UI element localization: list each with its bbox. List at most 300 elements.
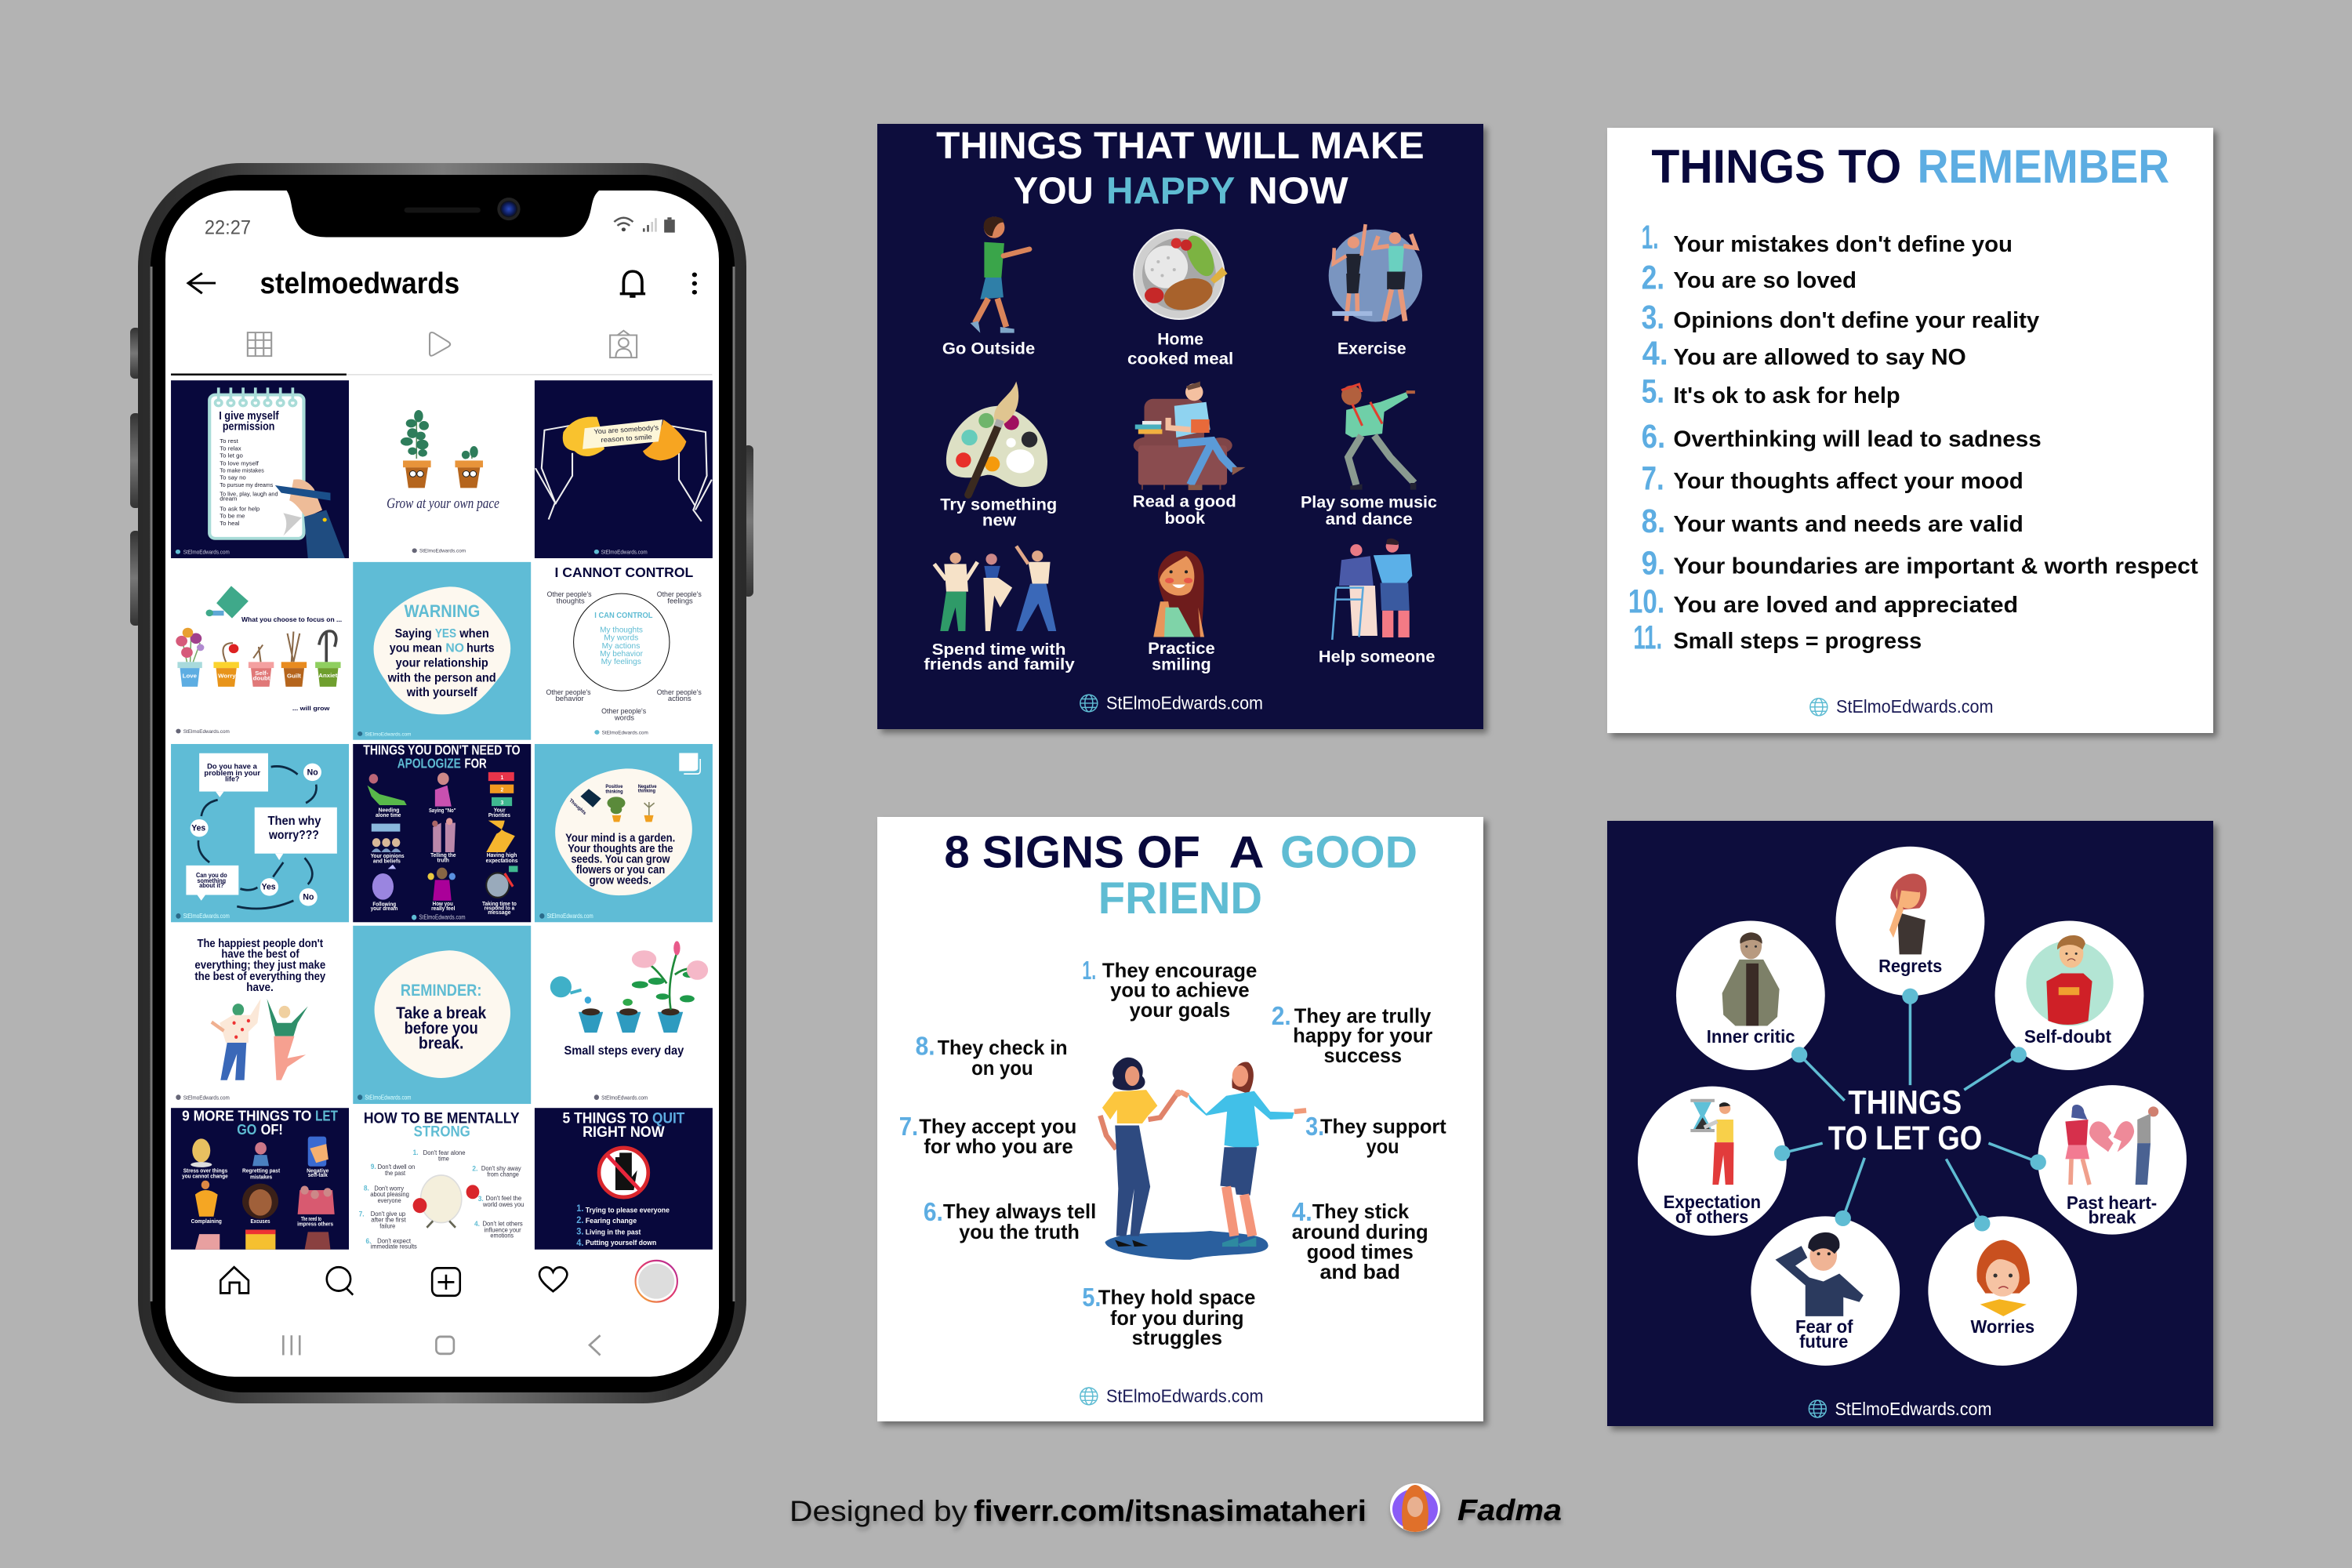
tile: 9 more things to let go of: OF!: [261, 1121, 283, 1138]
numbered list: Overthinking will lead to sadness: [1673, 426, 2042, 452]
tile: how to be mentally strong: Don't feel the: [486, 1195, 521, 1202]
tile: how to be mentally strong: 2.: [472, 1164, 477, 1172]
tile: I give myself permission: To pursue my dreams: [220, 481, 273, 488]
numbered signs: 2.: [1272, 1002, 1291, 1031]
heading: NOW: [1248, 170, 1348, 212]
icon: profile avatar: [636, 1261, 677, 1302]
tile: how to be mentally strong: HOW TO BE MENTALLY: [364, 1109, 520, 1127]
tile: what you choose to focus on: Self-: [255, 670, 269, 677]
numbered signs: for who you are: [924, 1134, 1073, 1158]
tile: reminder: REMINDER:: [401, 981, 481, 1000]
tile: why worry flowchart: about it?: [199, 882, 224, 889]
tile: reminder: StElmoEdwards.com: [365, 1094, 412, 1102]
tile: fortune cookie: You are somebody's: [593, 423, 659, 435]
circle: past heartbreak: break: [2088, 1207, 2136, 1227]
tile: I cannot control: Other people's: [601, 707, 647, 715]
tile: I cannot control: My actions: [602, 642, 640, 651]
circle: self-doubt: Self-doubt: [2024, 1026, 2111, 1047]
item: spend time with friends and family: friends and family: [924, 655, 1075, 673]
numbered signs: They accept you: [919, 1115, 1076, 1138]
circle: inner critic: Inner critic: [1707, 1026, 1795, 1047]
tile: your mind is a garden: Your thoughts are the: [568, 842, 673, 855]
notch with camera: [285, 189, 601, 237]
tile: warning: WARNING: [405, 601, 480, 621]
heading: THINGS: [1848, 1084, 1962, 1121]
tile: warning: hurts: [466, 641, 495, 655]
tile: how to be mentally strong: time: [438, 1155, 449, 1163]
tile: 5 things to quit right now: 4.: [576, 1238, 583, 1248]
numbered list: 2.: [1642, 259, 1664, 296]
tile: things you don't need to apologize for: truth: [437, 858, 449, 863]
item: home cooked meal: cooked meal: [1127, 349, 1233, 368]
numbered signs: They always tell: [943, 1200, 1096, 1223]
numbered signs: success: [1324, 1044, 1402, 1067]
tile: fortune cookie: reason to smile: [601, 433, 652, 444]
circle: past heartbreak: [2030, 1085, 2187, 1235]
numbered signs: 6.: [924, 1198, 943, 1227]
tile: how to be mentally strong: 4.: [474, 1220, 480, 1228]
item: play some music and dance: and dance: [1326, 509, 1413, 528]
tile: I give myself permission: To make mistakes: [220, 467, 264, 474]
tile: how to be mentally strong: 7.: [359, 1210, 365, 1218]
tile: why worry flowchart: StElmoEdwards.com: [183, 913, 230, 920]
tile: I give myself permission: To love myself: [220, 460, 260, 466]
numbered signs: on you: [971, 1056, 1033, 1080]
circle: worries: Worries: [1970, 1316, 2034, 1337]
tile: warning: NO: [445, 641, 464, 655]
icon: reels tab: [430, 332, 450, 356]
tile: things you don't need to apologize for: Saying "No": [429, 808, 456, 814]
tile: how to be mentally strong: world owes you: [482, 1201, 524, 1208]
tile: 9 more things to let go of: [171, 1108, 349, 1250]
tile: how to be mentally strong: everyone: [378, 1197, 401, 1204]
tile: small steps every day: [535, 926, 713, 1104]
numbered list: 5.: [1642, 372, 1664, 410]
tile: things you don't need to apologize for: StElmoEdwards.com: [419, 913, 466, 920]
icon: home: [220, 1267, 249, 1293]
tile: I cannot control: Other people's: [657, 590, 702, 598]
heading: 8 SIGNS OF: [944, 827, 1200, 877]
tile: I cannot control: Other people's: [546, 688, 591, 696]
circle: expectation of others: Expectation: [1664, 1192, 1761, 1212]
tile: I cannot control: My words: [604, 634, 638, 643]
tile: I cannot control: Other people's: [657, 688, 702, 696]
tile: the happiest people: The happiest people don't: [198, 938, 323, 950]
tile: things you don't need to apologize for: your dream: [371, 906, 397, 912]
numbered signs: struggles: [1132, 1326, 1222, 1349]
footer: website: StElmoEdwards.com: [1106, 693, 1263, 713]
tile: 5 things to quit right now: 3.: [576, 1227, 583, 1237]
numbered signs: 8.: [916, 1033, 935, 1061]
tile: I give myself permission: I give myself: [219, 410, 279, 423]
tile: things you don't need to apologize for: alone time: [376, 813, 401, 818]
tile: what you choose to focus on: doubt: [253, 675, 270, 682]
tile: your mind is a garden: Positive: [605, 785, 623, 789]
item: help someone: Help someone: [1319, 646, 1435, 666]
icon: bell: [620, 271, 645, 296]
heading: REMEMBER: [1918, 140, 2169, 193]
tile: reminder: break.: [419, 1034, 463, 1053]
circle: inner critic: [1676, 921, 1825, 1070]
icon: add post: [432, 1268, 460, 1296]
android navigation bar: [283, 1335, 601, 1356]
numbered list: You are loved and appreciated: [1673, 593, 2018, 618]
numbered signs: and bad: [1319, 1260, 1400, 1283]
heading: [1651, 140, 2169, 193]
tile: things you don't need to apologize for: FOR: [464, 756, 487, 771]
tile: I cannot control: StElmoEdwards.com: [602, 731, 648, 735]
numbered list: 6.: [1642, 418, 1665, 456]
tile: 9 more things to let go of: Negative: [307, 1168, 328, 1174]
tile: how to be mentally strong: [359, 1112, 524, 1248]
tile: warning: Saying: [395, 626, 432, 641]
tile: things you don't need to apologize for: Having high: [487, 853, 517, 858]
tile: 5 things to quit right now: RIGHT NOW: [583, 1123, 665, 1140]
tile: Grow at your own pace: StElmoEdwards.com: [419, 549, 466, 554]
tile: 9 more things to let go of: Stress over things: [183, 1168, 227, 1174]
heading: THINGS THAT WILL MAKE: [936, 125, 1425, 167]
tile: why worry flowchart: Do you have a: [207, 762, 258, 770]
numbered list: [1628, 219, 2198, 657]
tile: things you don't need to apologize for: Your: [494, 808, 506, 813]
numbered signs: 7.: [899, 1112, 918, 1142]
illustration: two friends high five: [1100, 1058, 1306, 1260]
tile: I give myself permission: To say no: [220, 474, 246, 481]
tile: how to be mentally strong: 6.: [365, 1237, 371, 1245]
circle: fear of future: Fear of: [1795, 1316, 1853, 1337]
tile: I cannot control: I CANNOT CONTROL: [555, 565, 693, 580]
tile: I give myself permission: permission: [223, 420, 274, 434]
heading: HAPPY: [1106, 170, 1235, 212]
panel: things to remember: [1607, 128, 2213, 733]
circle: expectation of others: [1638, 1087, 1790, 1236]
tile: 5 things to quit right now: QUIT: [652, 1109, 685, 1127]
tile: why worry flowchart: Then why: [267, 815, 321, 828]
item: practice smiling: Practice: [1148, 638, 1215, 658]
tile: warning: with yourself: [406, 685, 477, 699]
icon: search: [327, 1267, 353, 1295]
tile: why worry flowchart: No: [303, 892, 314, 902]
tile: 9 more things to let go of: you cannot change: [182, 1174, 228, 1179]
tile: why worry flowchart: No: [307, 768, 318, 777]
tile: things you don't need to apologize for: 1: [501, 775, 503, 781]
tile: 9 more things to let go of: The need to: [301, 1217, 321, 1222]
item: play some music and dance: Play some music: [1301, 492, 1437, 511]
tile: I cannot control: behavior: [556, 695, 584, 702]
tile: 9 more things to let go of: mistakes: [250, 1174, 272, 1181]
tile: why worry flowchart: [171, 744, 349, 922]
item: try something new: Try something: [940, 494, 1057, 514]
tile: I cannot control: feelings: [667, 597, 693, 605]
tile: reminder: Take a break: [396, 1004, 487, 1022]
status icons: [614, 217, 675, 233]
credit line: [789, 1483, 1562, 1532]
tile: Grow at your own pace: [353, 380, 531, 558]
panel: things to let go: [1607, 821, 2213, 1426]
tile: how to be mentally strong: immediate results: [371, 1243, 417, 1250]
icon: grid tab: [248, 332, 271, 356]
tile: reminder: [353, 926, 531, 1104]
tile: 5 things to quit right now: [535, 1108, 713, 1250]
tile: why worry flowchart: something: [198, 877, 226, 884]
tile: why worry flowchart: Can you do: [196, 872, 227, 879]
numbered list: 3.: [1642, 299, 1664, 336]
tile: I cannot control: Other people's: [547, 590, 592, 598]
numbered signs: They encourage: [1102, 959, 1257, 982]
tile: things you don't need to apologize for: Priorities: [488, 813, 510, 818]
tile: what you choose to focus on: Love: [183, 673, 197, 680]
tile: I give myself permission: To let go: [220, 452, 243, 459]
tile: how to be mentally strong: about pleasing: [370, 1191, 409, 1198]
tile: things you don't need to apologize for: 2: [501, 787, 503, 793]
numbered list: Your wants and needs are valid: [1673, 512, 2024, 537]
tile: how to be mentally strong: after the first: [371, 1216, 407, 1224]
circle: past heartbreak: Past heart-: [2067, 1192, 2157, 1213]
numbered list: 8.: [1642, 503, 1665, 540]
tile: 5 things to quit right now: Putting yourself down: [586, 1239, 657, 1247]
tile: I give myself permission: To ask for help: [220, 506, 260, 512]
tile: I give myself permission: dream: [220, 495, 237, 502]
tile: I cannot control: My thoughts: [600, 626, 643, 634]
tile: things you don't need to apologize for: message: [488, 910, 511, 916]
tile: why worry flowchart: Yes: [262, 882, 276, 892]
tile: 5 things to quit right now: 1.: [576, 1204, 583, 1214]
tile: why worry flowchart: problem in your: [204, 769, 260, 777]
tile: I give myself permission: To live, play, laugh and: [220, 491, 278, 497]
tile: 9 more things to let go of: Complaining: [191, 1219, 222, 1225]
tile: what you choose to focus on: ... will grow: [292, 705, 330, 712]
numbered signs: 1.: [1082, 956, 1096, 985]
numbered signs: They check in: [938, 1036, 1068, 1059]
tile: warning: [353, 562, 531, 740]
numbered list: 7.: [1642, 459, 1664, 497]
phone screen: [165, 191, 719, 1377]
tile: I cannot control: actions: [668, 695, 691, 702]
tile: things you don't need to apologize for: and beliefs: [373, 858, 401, 865]
heading: [1828, 1084, 1982, 1157]
numbered signs: you: [1367, 1134, 1399, 1158]
tile: reminder: before you: [405, 1019, 478, 1037]
tab underline: [171, 373, 712, 376]
tile: I cannot control: words: [614, 714, 634, 721]
tile: things you don't need to apologize for: APOLOGIZE: [397, 756, 461, 771]
tile: how to be mentally strong: Don't shy away: [481, 1165, 521, 1172]
profile name: stelmoedwards: [260, 267, 459, 300]
numbered signs: [899, 956, 1446, 1349]
tile: how to be mentally strong: 8.: [364, 1184, 369, 1192]
tile: how to be mentally strong: STRONG: [414, 1123, 470, 1140]
phone side buttons: [130, 328, 753, 626]
item: go outside: [942, 216, 1035, 358]
circle: self-doubt: [1995, 921, 2143, 1070]
numbered list: It's ok to ask for help: [1673, 383, 1900, 408]
back arrow: [188, 273, 216, 293]
tile: your mind is a garden: flowers or you can: [576, 863, 665, 876]
heading: TO LET GO: [1828, 1120, 1982, 1157]
tile: how to be mentally strong: influence your: [485, 1226, 521, 1233]
tile: your mind is a garden: [535, 744, 713, 922]
item: go outside: Go Outside: [942, 338, 1035, 358]
tile: small steps every day: StElmoEdwards.com: [601, 1095, 648, 1102]
tile: 9 more things to let go of: LET: [315, 1108, 338, 1124]
numbered list: Your boundaries are important & worth respect: [1673, 554, 2198, 579]
tile: 5 things to quit right now: Fearing change: [586, 1217, 637, 1225]
numbered list: 4.: [1642, 335, 1668, 372]
item: read a good book: Read a good: [1133, 491, 1236, 510]
heading: THINGS TO: [1651, 140, 1901, 193]
tile: I cannot control: thoughts: [557, 597, 585, 605]
tile: warning: your relationship: [396, 655, 488, 670]
numbered list: 10.: [1628, 583, 1664, 621]
tile: warning: with the person and: [387, 670, 496, 684]
tile: your mind is a garden: thinking: [605, 789, 623, 794]
heading: A: [1229, 827, 1265, 877]
tile: your mind is a garden: Thoughts: [568, 798, 587, 816]
tile: the happiest people: [171, 926, 349, 1104]
item: home cooked meal: [1127, 230, 1233, 368]
designer text: Designed by: [789, 1495, 968, 1527]
tile: I give myself permission: StElmoEdwards.com: [183, 549, 230, 556]
numbered signs: They are trully: [1294, 1004, 1432, 1027]
item: try something new: [940, 382, 1057, 529]
tile: the happiest people: StElmoEdwards.com: [183, 1095, 230, 1102]
tile: 9 more things to let go of: impress others: [297, 1221, 333, 1228]
tile: small steps every day: Small steps every day: [564, 1044, 684, 1058]
tile: what you choose to focus on: Worry: [218, 673, 236, 680]
tile: your mind is a garden: Negative: [638, 785, 657, 789]
numbered signs: you the truth: [959, 1220, 1080, 1243]
tile: how to be mentally strong: Don't let others: [482, 1220, 523, 1228]
tile: I give myself permission: To heal: [220, 520, 240, 527]
numbered list: You are allowed to say NO: [1673, 345, 1966, 370]
tile: how to be mentally strong: Don't fear alone: [423, 1149, 466, 1156]
numbered signs: happy for your: [1293, 1024, 1432, 1047]
status time: 22:27: [205, 216, 251, 238]
numbered list: 11.: [1633, 619, 1662, 657]
designer text: fiverr.com/itsnasimataheri: [974, 1495, 1367, 1528]
numbered signs: 3.: [1305, 1112, 1324, 1142]
circle: regrets: Regrets: [1878, 956, 1942, 976]
tile: what you choose to focus on: Anxiety: [318, 672, 341, 679]
item: help someone: [1319, 539, 1435, 666]
tile: how to be mentally strong: Don't dwell on: [378, 1163, 415, 1171]
tile: 9 more things to let go of: GO: [237, 1121, 256, 1138]
item: exercise: [1329, 224, 1422, 358]
tile: how to be mentally strong: 1.: [413, 1149, 419, 1156]
tile: things you don't need to apologize for: Following: [372, 902, 396, 908]
heading: [936, 125, 1425, 212]
tile: how to be mentally strong: 3.: [478, 1195, 484, 1203]
tile: why worry flowchart: worry???: [268, 829, 319, 842]
tile: 9 more things to let go of: 9 MORE THINGS TO: [182, 1108, 311, 1124]
circle: fear of future: [1751, 1210, 1900, 1366]
tile: how to be mentally strong: 9.: [371, 1163, 376, 1171]
connector lines: [1782, 996, 2038, 1223]
numbered signs: 5.: [1082, 1283, 1101, 1312]
tile: I give myself permission: To rest: [220, 437, 239, 445]
item: exercise: Exercise: [1338, 338, 1406, 358]
tile: warning: YES: [435, 626, 456, 641]
tile: fortune cookie: StElmoEdwards.com: [601, 549, 648, 556]
tile: 5 things to quit right now: 2.: [576, 1216, 583, 1225]
tile: fortune cookie: [535, 380, 713, 558]
tile: 5 things to quit right now: Living in the past: [586, 1228, 641, 1236]
tile: why worry flowchart: Yes: [191, 823, 205, 833]
phone mockup: [130, 163, 753, 1403]
tile: things you don't need to apologize for: really feel: [431, 906, 455, 912]
heading: GOOD: [1280, 827, 1417, 877]
tile: I cannot control: My behavior: [600, 650, 644, 659]
tile: your mind is a garden: StElmoEdwards.com: [547, 913, 593, 920]
tile: 9 more things to let go of: self-talk: [308, 1173, 328, 1178]
tile: what you choose to focus on: What you choose to focus on ...: [241, 615, 342, 623]
tile: warning: you mean: [390, 641, 442, 655]
row of cropped tiles: [171, 1108, 713, 1250]
numbered signs: They support: [1320, 1115, 1446, 1138]
numbered list: Your mistakes don't define you: [1673, 232, 2013, 257]
tile: I give myself permission: To be me: [220, 513, 245, 520]
tile: warning: StElmoEdwards.com: [365, 732, 412, 737]
tile: things you don't need to apologize for: THINGS YOU DON'T NEED TO: [363, 742, 521, 758]
tile: the happiest people: have the best of: [221, 948, 299, 961]
numbered signs: for you during: [1110, 1306, 1244, 1330]
tile: things you don't need to apologize for: respond to a: [485, 906, 514, 912]
tile: the happiest people: the best of everything they: [194, 970, 326, 983]
tile: your mind is a garden: grow weeds.: [589, 873, 652, 887]
tile: things you don't need to apologize for: Telling the: [430, 853, 456, 858]
circle: expectation of others: of others: [1675, 1207, 1748, 1227]
heading: FRIEND: [1098, 873, 1262, 924]
numbered signs: around during: [1292, 1220, 1428, 1243]
numbered signs: They stick: [1312, 1200, 1410, 1223]
tile: what you choose to focus on: Guilt: [287, 673, 301, 680]
tile: things you don't need to apologize for: expectations: [486, 858, 518, 864]
panel: things that will make you happy now: [877, 124, 1483, 729]
icon: heart: [539, 1267, 567, 1291]
numbered list: You are so loved: [1673, 268, 1857, 293]
name: Fadma: [1457, 1494, 1562, 1527]
tile: how to be mentally strong: Don't give up: [371, 1210, 405, 1218]
panel: 8 signs of a good friend: [877, 817, 1483, 1421]
tile: your mind is a garden: seeds. You can grow: [571, 852, 670, 866]
circle: worries: [1928, 1215, 2077, 1366]
tile: things you don't need to apologize for: Your opinions: [371, 854, 405, 859]
tile: I cannot control: [535, 562, 713, 740]
numbered list: 1.: [1642, 219, 1659, 256]
tile: how to be mentally strong: Don't worry: [374, 1185, 404, 1192]
numbered signs: good times: [1307, 1240, 1414, 1263]
designer text: [789, 1495, 1367, 1528]
tile: what you choose to focus on: StElmoEdwards.com: [183, 729, 230, 735]
item: spend time with friends and family: Spend time with: [932, 641, 1065, 659]
item: play some music and dance: [1301, 384, 1437, 528]
tile: your mind is a garden: Your mind is a garden.: [565, 831, 675, 844]
item: home cooked meal: Home: [1157, 329, 1203, 349]
item: try something new: new: [982, 510, 1016, 529]
icon: more menu: [692, 273, 697, 295]
tile: the happiest people: have.: [246, 981, 274, 994]
item: spend time with friends and family: [924, 546, 1075, 673]
footer: website: StElmoEdwards.com: [1835, 1399, 1992, 1419]
numbered list: Opinions don't define your reality: [1673, 308, 2039, 333]
item: practice smiling: [1148, 551, 1215, 673]
item: read a good book: book: [1165, 508, 1206, 528]
heading: [944, 827, 1417, 924]
numbered signs: 4.: [1292, 1198, 1312, 1227]
numbered signs: your goals: [1130, 998, 1230, 1022]
tile: how to be mentally strong: the past: [385, 1170, 406, 1177]
phone body: [138, 163, 746, 1403]
